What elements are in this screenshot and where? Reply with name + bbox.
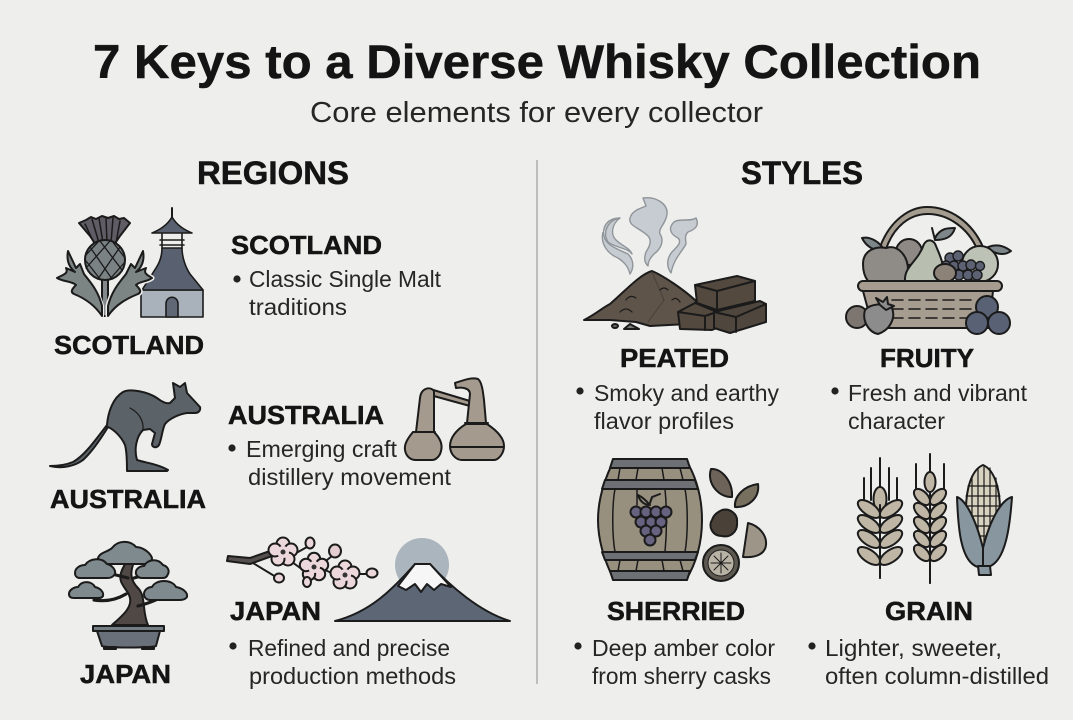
panel: Japan <box>69 538 510 689</box>
icon: peat pile and bricks <box>584 271 766 333</box>
bullet text: often column-distilled <box>825 663 1049 689</box>
icon: copper stills <box>405 378 504 460</box>
panel: Fruity <box>831 207 1028 434</box>
bullet text: Refined and precise <box>248 635 450 661</box>
panel: Australia <box>50 378 504 514</box>
panel: Grain <box>808 454 1049 689</box>
heading: Sherried: SHERRIED <box>607 596 745 626</box>
bullet text <box>574 635 775 689</box>
bullet text: Deep amber color <box>592 635 775 661</box>
heading: Peated: PEATED <box>620 343 729 373</box>
bullet text: Lighter, sweeter, <box>825 635 1002 661</box>
subtitle: Core elements for every collector <box>310 97 763 129</box>
bullet text <box>229 635 456 689</box>
label: Australia: AUSTRALIA <box>50 484 206 514</box>
bullet text: from sherry casks <box>592 663 771 689</box>
bullet text: distillery movement <box>248 464 452 490</box>
icon: fruit basket <box>846 207 1011 334</box>
bullet text <box>228 436 452 490</box>
label: Scotland: SCOTLAND <box>54 330 204 360</box>
bullet text: Classic Single Malt <box>249 266 442 292</box>
bullet text: character <box>848 408 945 434</box>
bullet text <box>576 380 779 434</box>
heading: Grain: GRAIN <box>885 596 973 626</box>
bullet text: flavor profiles <box>594 408 734 434</box>
panel: Peated <box>576 198 779 434</box>
bullet text <box>808 635 1049 689</box>
icon: bonsai <box>69 542 187 649</box>
label: Japan: JAPAN <box>80 659 171 689</box>
icon: wheat stalk one <box>855 458 905 578</box>
icon: distillery pagoda <box>141 208 203 317</box>
icon: thistle <box>57 216 152 316</box>
bullet text: Fresh and vibrant <box>848 380 1028 406</box>
icon: grape cluster <box>630 494 672 546</box>
icon: dried fruit <box>703 469 766 581</box>
bullet text: Smoky and earthy <box>594 380 779 406</box>
icon: Mount Fuji with sun <box>335 538 510 621</box>
panel: Sherried <box>574 459 775 689</box>
heading: regions: REGIONS <box>197 155 349 191</box>
icon: corn cob <box>957 465 1012 575</box>
heading: Fruity: FRUITY <box>880 343 974 373</box>
bullet text: Emerging craft <box>246 436 398 462</box>
bullet text <box>233 266 442 320</box>
icon: smoke <box>602 198 697 274</box>
bullet text <box>831 380 1028 434</box>
icon: wheat stalk two <box>911 454 949 583</box>
panel: Scotland <box>54 208 442 360</box>
bullet text: production methods <box>249 663 456 689</box>
heading: Scotland: SCOTLAND <box>231 230 382 260</box>
heading: Australia: AUSTRALIA <box>228 400 384 430</box>
icon: sherry barrel <box>598 459 702 580</box>
icon: kangaroo <box>50 383 200 471</box>
heading: Japan: JAPAN <box>230 596 321 626</box>
icon: cherry blossom branch <box>227 538 378 588</box>
title: 7 Keys to a Diverse Whisky Collection <box>93 35 981 88</box>
heading: styles: STYLES <box>741 155 863 191</box>
bullet text: traditions <box>249 294 347 320</box>
